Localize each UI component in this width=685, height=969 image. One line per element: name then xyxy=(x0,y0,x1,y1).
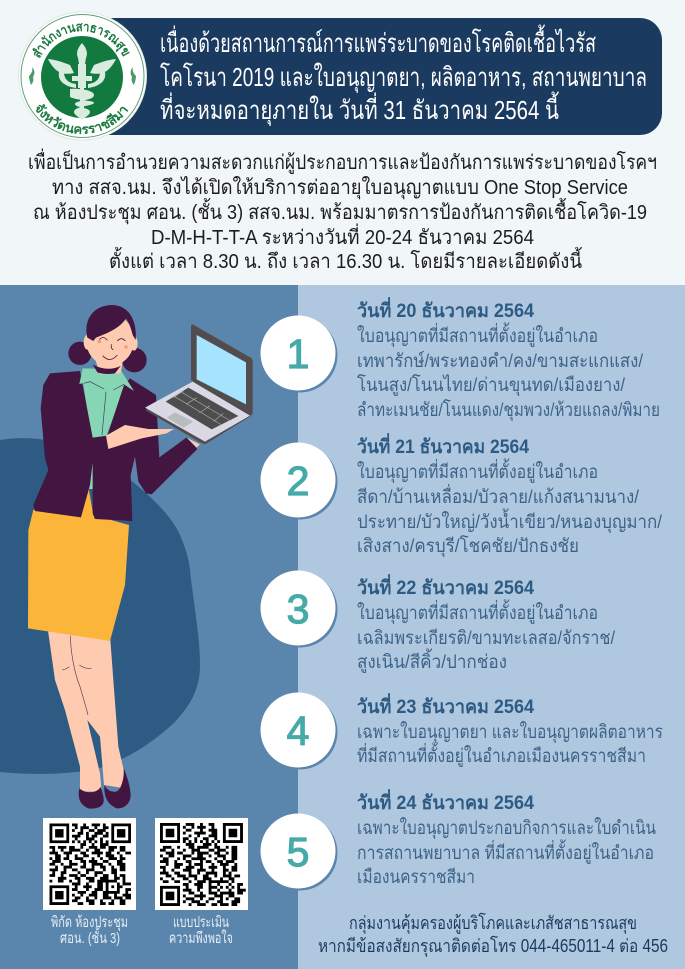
banner heading text: ที่จะหมดอายุภายใน วันที่ 31 ธันวาคม 2564 นี้ xyxy=(160,91,559,126)
step 1 details: วันที่ 20 ธันวาคม 2564 xyxy=(357,297,534,322)
dark blob xyxy=(0,438,200,774)
QR captions: พิกัด ห้องประชุม xyxy=(51,914,128,932)
hair buns xyxy=(68,342,92,365)
step 2 details: วันที่ 21 ธันวาคม 2564 xyxy=(357,433,529,458)
hair xyxy=(86,305,136,341)
QR captions: ศอน. (ชั้น 3) xyxy=(60,927,120,947)
panel: left illustration background xyxy=(0,285,298,969)
QR captions: ความพึงพอใจ xyxy=(169,929,233,947)
step 1 details xyxy=(357,297,660,422)
step 2 details: ใบอนุญาตที่มีสถานที่ตั้งอยู่ในอำเภอ xyxy=(357,458,598,484)
step 2 details: ประทาย/บัวใหญ่/วังน้ำเขียว/หนองบุญมาก/ xyxy=(357,508,663,534)
step 3 details: ใบอนุญาตที่มีสถานที่ตั้งอยู่ในอำเภอ xyxy=(357,599,598,625)
intro paragraph: ตั้งแต่ เวลา 8.30 น. ถึง เวลา 16.30 น. โดยมีรายละเอียดดังนี้ xyxy=(109,247,582,273)
step 1 details: ใบอนุญาตที่มีสถานที่ตั้งอยู่ในอำเภอ xyxy=(357,322,598,348)
QR code: meeting room location xyxy=(43,818,136,910)
step 3 number badge xyxy=(260,570,338,648)
keyboard xyxy=(166,388,238,429)
step 4 details: วันที่ 23 ธันวาคม 2564 xyxy=(357,693,534,718)
intro paragraph: ทาง สสจ.นม. จึงได้เปิดให้บริการต่ออายุใบอนุญาตแบบ One Stop Service xyxy=(52,176,628,200)
step 5 details xyxy=(357,789,656,887)
neck and face xyxy=(95,358,123,374)
laptop xyxy=(145,324,253,448)
step 1 details: เทพารักษ์/พระทองคำ/คง/ขามสะแกแสง/ xyxy=(357,350,644,371)
QR code: satisfaction survey xyxy=(155,818,248,910)
step 5 details: เมืองนครราชสีมา xyxy=(357,866,475,887)
step 4 details xyxy=(357,693,663,767)
step 2 details: เสิงสาง/ครบุรี/โชคชัย/ปักธงชัย xyxy=(357,535,579,558)
legs xyxy=(48,628,125,792)
step 5 details: วันที่ 24 ธันวาคม 2564 xyxy=(357,789,534,814)
QR captions xyxy=(51,914,233,947)
shirt xyxy=(83,380,126,489)
step 2 number badge xyxy=(260,442,338,520)
step 3 details: สูงเนิน/สีคิ้ว/ปากช่อง xyxy=(357,648,507,673)
front hand xyxy=(106,425,174,449)
caduceus symbol xyxy=(48,43,116,120)
header banner xyxy=(70,18,662,135)
step 3 details xyxy=(357,574,616,673)
QR captions: แบบประเมิน xyxy=(173,914,229,931)
logo: provincial public health office seal: สำนักงานสาธารณสุข xyxy=(32,23,130,58)
choker xyxy=(93,364,121,374)
step 2 number badge: 2 xyxy=(287,458,309,504)
intro paragraph: D-M-H-T-T-A ระหว่างวันที่ 20-24 ธันวาคม 2564 xyxy=(151,223,534,249)
touchpad xyxy=(167,412,193,428)
shirt collar xyxy=(79,368,134,391)
logo: provincial public health office seal: จังหวัดนครราชสีมา xyxy=(36,104,128,134)
step 2 details xyxy=(357,433,663,558)
step 4 number badge xyxy=(260,692,338,770)
step 1 number badge: 1 xyxy=(287,331,309,377)
step 3 details: เฉลิมพระเกียรติ/ขามทะเลสอ/จักราช/ xyxy=(357,627,616,648)
step 4 number badge: 4 xyxy=(287,708,309,754)
step 2 details: สีดา/บ้านเหลื่อม/บัวลาย/แก้งสนามนาง/ xyxy=(357,484,640,507)
logo: provincial public health office seal xyxy=(18,12,147,140)
step 5 number badge: 5 xyxy=(287,829,309,875)
jacket xyxy=(33,371,197,521)
eyes, smile, cheeks xyxy=(99,337,125,360)
illustration: woman holding a laptop xyxy=(28,305,253,809)
step 5 number badge xyxy=(260,814,338,890)
step 3 number badge: 3 xyxy=(287,586,309,632)
panel: right schedule background xyxy=(298,285,685,969)
step 1 number badge xyxy=(260,316,338,392)
skirt xyxy=(28,488,129,641)
step 3 details: วันที่ 22 ธันวาคม 2564 xyxy=(357,574,534,599)
footer contact text xyxy=(318,912,668,957)
banner heading text xyxy=(160,24,647,126)
intro paragraph xyxy=(28,148,657,273)
shoes xyxy=(79,768,131,809)
step 1 details: โนนสูง/โนนไทย/ด่านขุนทด/เมืองยาง/ xyxy=(357,374,626,397)
